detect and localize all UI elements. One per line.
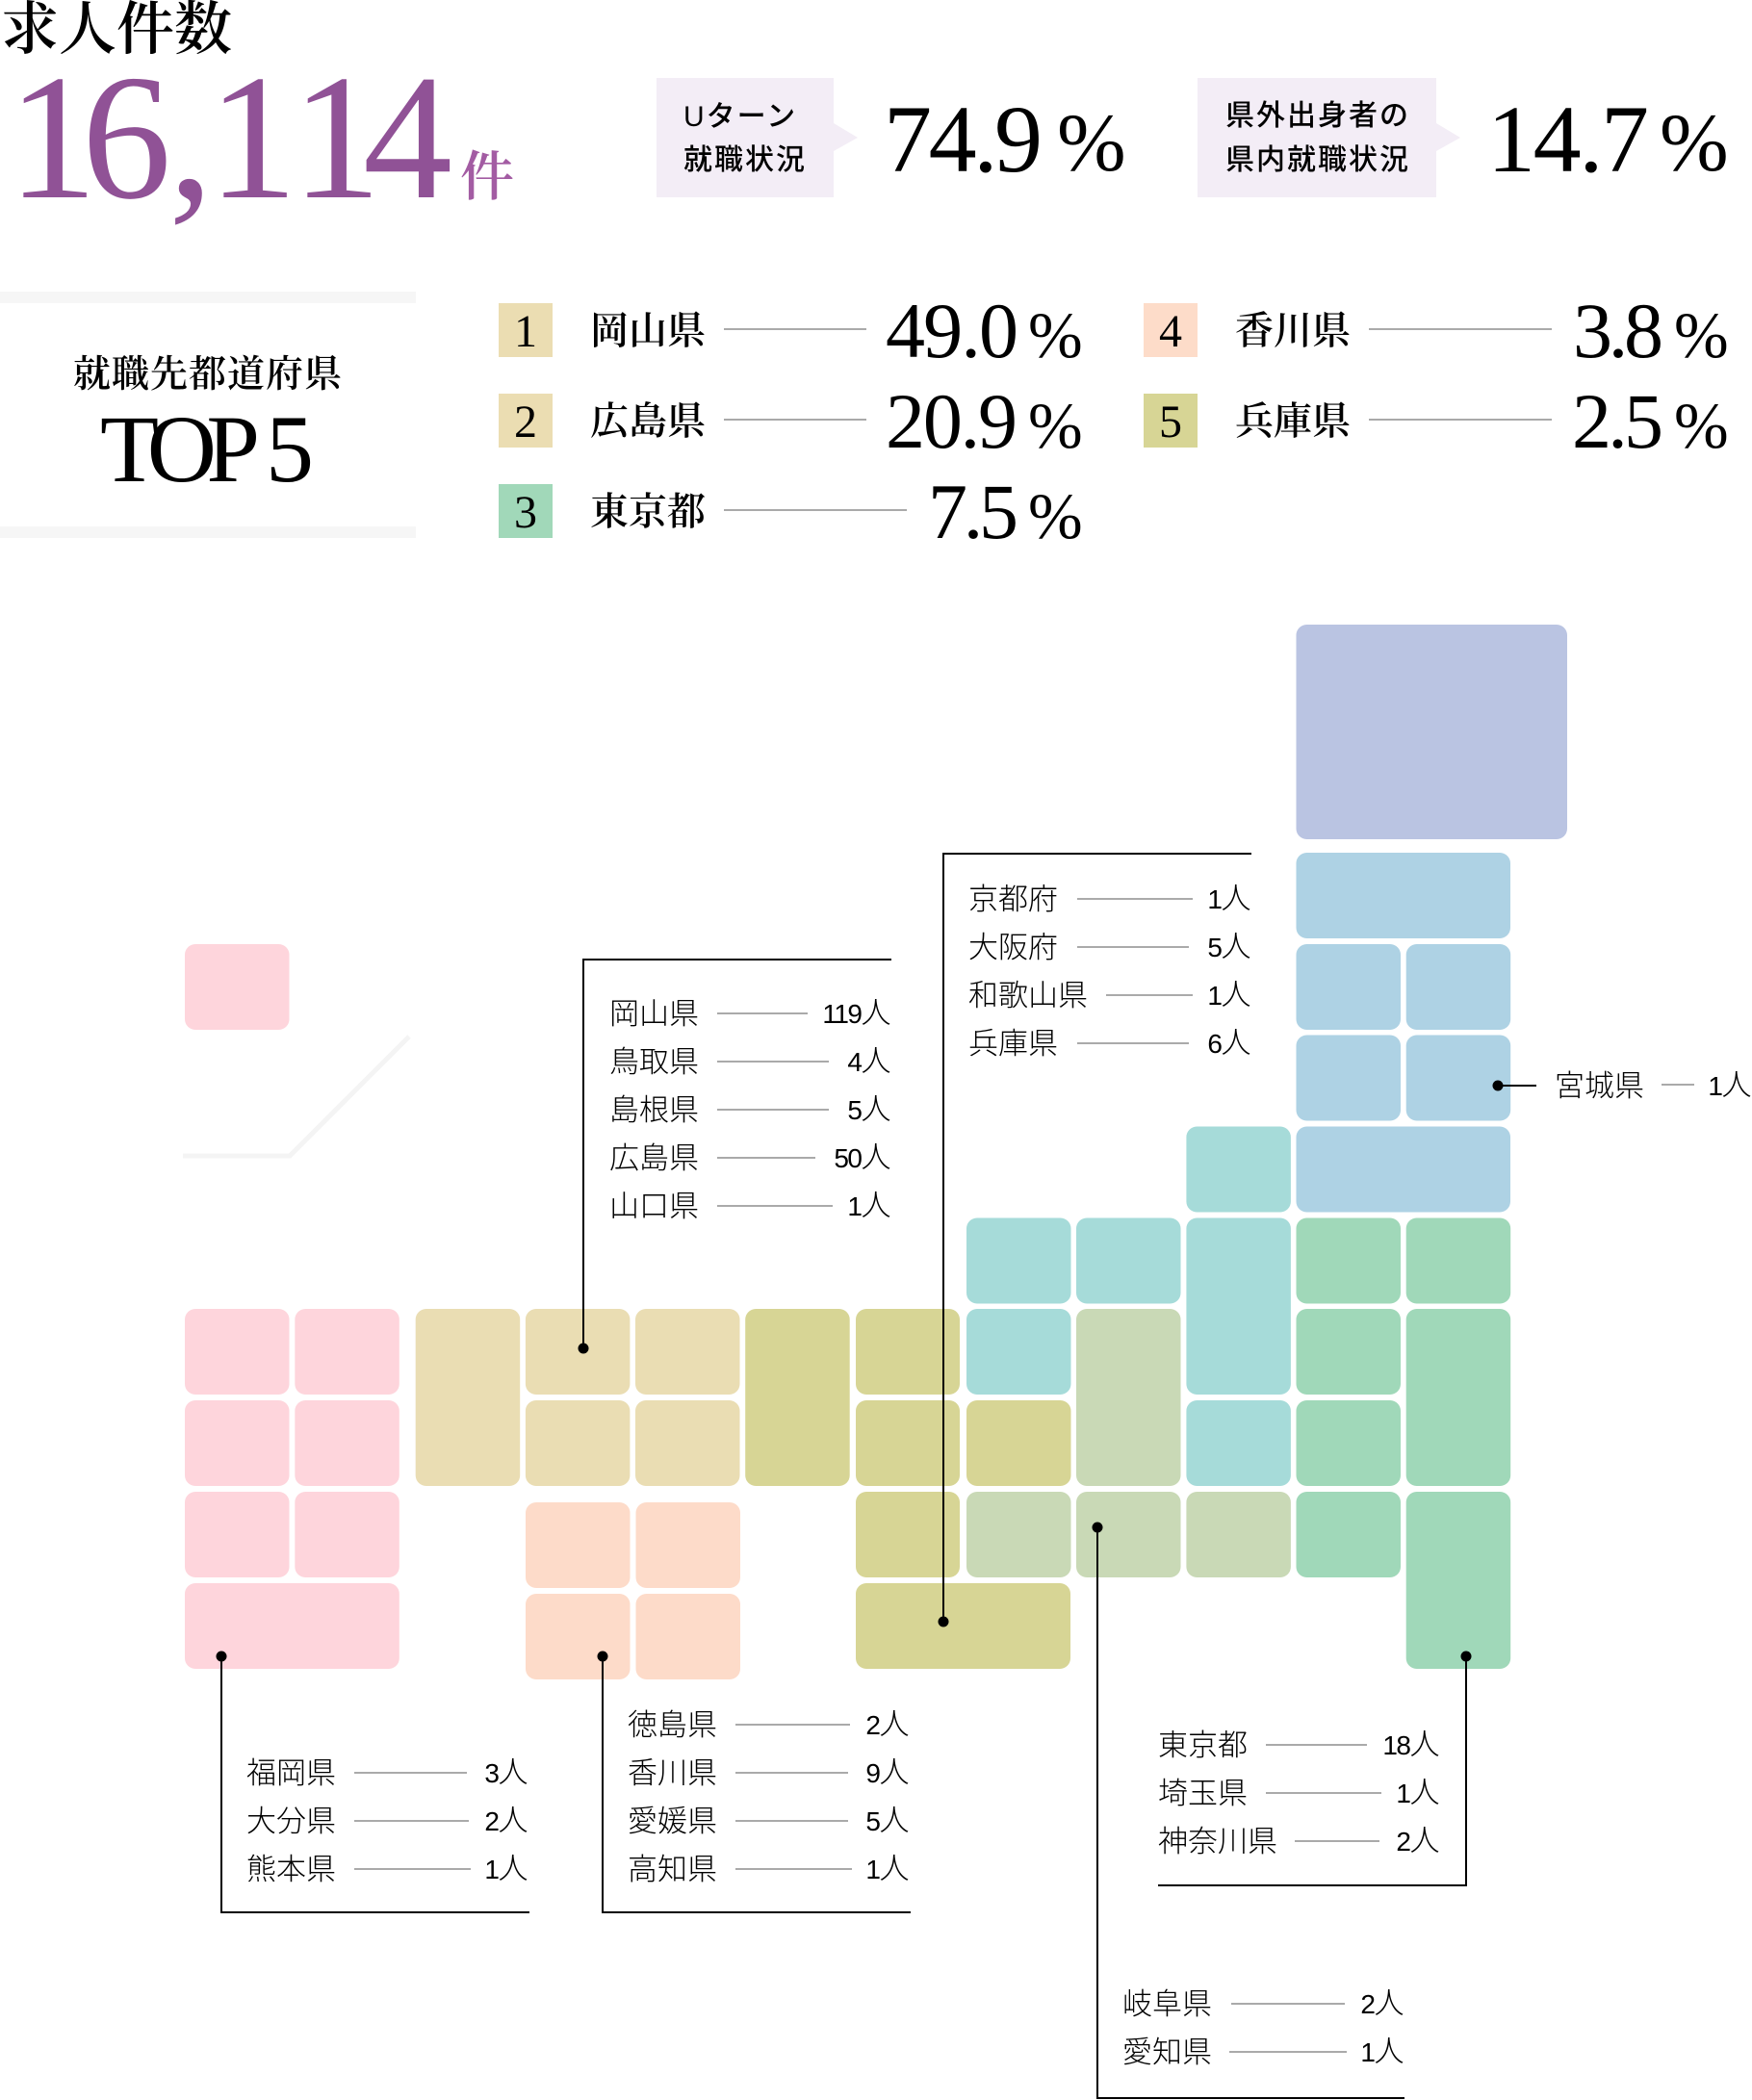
callout: Kanto list bbox=[1158, 1652, 1471, 1885]
callout: Shikoku list: 香川県 bbox=[628, 1756, 717, 1790]
rank 4: Kagawa: % bbox=[1674, 298, 1729, 371]
rank 3: Tokyo bbox=[499, 468, 1083, 555]
rank 1: Okayama: % bbox=[1028, 298, 1083, 371]
callout: local-origin employment bbox=[1198, 78, 1460, 197]
rank 5: Hyogo: % bbox=[1674, 389, 1729, 462]
callout: Kinki list bbox=[938, 854, 1251, 1626]
callout: Shikoku list: 愛媛県 bbox=[628, 1805, 717, 1838]
rank 5: Hyogo: 兵庫県 bbox=[1235, 399, 1351, 443]
region: Tokai bbox=[966, 1309, 1291, 1577]
callout: Shikoku list: 徳島県 bbox=[628, 1708, 717, 1742]
callout: Chugoku list: 5人 bbox=[847, 1092, 889, 1126]
region: Tohoku bbox=[1296, 853, 1510, 1213]
callout: Miyagi bbox=[1492, 1068, 1750, 1103]
region: Hokuriku-Shinetsu bbox=[966, 1126, 1291, 1486]
rank 2: Hiroshima: 20.9 bbox=[886, 377, 1018, 465]
rank 1: Okayama: 1 bbox=[514, 306, 537, 357]
callout: Kinki list: 兵庫県 bbox=[968, 1027, 1058, 1061]
callout: Kyushu list: 大分県 bbox=[246, 1805, 336, 1838]
callout: Kanto list: 埼玉県 bbox=[1158, 1777, 1248, 1810]
callout: Chugoku list bbox=[578, 960, 891, 1353]
region: Kyushu bbox=[185, 1309, 399, 1669]
stat: 74.9%: 74.9 bbox=[884, 86, 1043, 192]
panel: top 5 heading: 就職先都道府県 bbox=[73, 354, 343, 396]
region: Hokkaido bbox=[1296, 625, 1567, 839]
rank 2: Hiroshima: 2 bbox=[514, 397, 537, 448]
callout: Kanto list: 神奈川県 bbox=[1158, 1825, 1277, 1858]
inset divider: Okinawa boundary bbox=[183, 1037, 409, 1156]
callout: Shikoku list: 2人 bbox=[865, 1707, 909, 1741]
panel: top 5 heading: TOP bbox=[100, 396, 260, 502]
stat: 14.7% bbox=[1487, 86, 1729, 192]
rank 1: Okayama bbox=[499, 287, 1083, 374]
callout: local-origin employment: 県内就職状況 bbox=[1225, 144, 1410, 176]
rank 3: Tokyo: 東京都 bbox=[590, 490, 706, 533]
region: Kinki bbox=[745, 1309, 1070, 1669]
rank 2: Hiroshima: % bbox=[1028, 389, 1083, 462]
callout: Tokai list: 1人 bbox=[1360, 2035, 1404, 2068]
callout: Tokai list: 2人 bbox=[1360, 1986, 1404, 2020]
callout: Chugoku list: 1人 bbox=[847, 1189, 889, 1222]
callout: Shikoku list: 9人 bbox=[865, 1755, 909, 1789]
callout: Shikoku list: 1人 bbox=[865, 1852, 909, 1885]
stat: 14.7%: % bbox=[1660, 96, 1729, 189]
callout: Shikoku list: 5人 bbox=[865, 1804, 909, 1837]
callout: Kinki list: 1人 bbox=[1207, 882, 1250, 915]
callout: Tokai list: 岐阜県 bbox=[1122, 1987, 1212, 2021]
big number: 16,114 openings: 件 bbox=[460, 148, 514, 208]
rank 4: Kagawa: 香川県 bbox=[1235, 309, 1351, 352]
rank 4: Kagawa bbox=[1144, 287, 1729, 374]
callout: Chugoku list: 島根県 bbox=[609, 1093, 699, 1127]
map: Japan tile map bbox=[185, 625, 1567, 1679]
callout: Chugoku list: 119人 bbox=[822, 996, 889, 1030]
callout: Kyushu list: 熊本県 bbox=[246, 1853, 336, 1886]
rank 5: Hyogo: 5 bbox=[1159, 397, 1182, 448]
rank 1: Okayama: 岡山県 bbox=[590, 309, 706, 352]
callout: Kanto list: 1人 bbox=[1396, 1776, 1438, 1809]
callout: Chugoku list: 4人 bbox=[847, 1044, 889, 1078]
callout: Miyagi: 宮城県 bbox=[1555, 1069, 1644, 1103]
callout: Chugoku list: 岡山県 bbox=[609, 997, 699, 1031]
rank 5: Hyogo bbox=[1144, 377, 1729, 465]
callout: U-turn employment: 就職状況 bbox=[683, 144, 807, 176]
callout: Kanto list: 2人 bbox=[1396, 1824, 1438, 1857]
callout: Kinki list: 大阪府 bbox=[968, 931, 1058, 964]
rank 2: Hiroshima: 広島県 bbox=[590, 399, 706, 443]
panel: top 5 heading: 5 bbox=[266, 396, 314, 502]
callout: Kyushu list: 3人 bbox=[484, 1755, 528, 1789]
callout: local-origin employment: 県外出身者の bbox=[1225, 100, 1410, 132]
panel: top 5 heading bbox=[0, 292, 416, 538]
callout: Shikoku list bbox=[597, 1652, 911, 1912]
callout: Kanto list: 18人 bbox=[1382, 1728, 1438, 1761]
big number: 16,114 openings: 16,114 bbox=[8, 38, 452, 237]
callout: Kyushu list: 1人 bbox=[484, 1852, 528, 1885]
callout: Shikoku list: 高知県 bbox=[628, 1853, 717, 1886]
rank 4: Kagawa: 3.8 bbox=[1573, 287, 1663, 374]
callout: Chugoku list: 鳥取県 bbox=[609, 1045, 699, 1079]
callout: Kyushu list: 福岡県 bbox=[246, 1756, 336, 1790]
callout: Kyushu list bbox=[216, 1652, 529, 1912]
callout: Kinki list: 6人 bbox=[1207, 1026, 1250, 1060]
callout: Kinki list: 京都府 bbox=[968, 883, 1058, 916]
callout: Chugoku list: 広島県 bbox=[609, 1141, 699, 1175]
rank 4: Kagawa: 4 bbox=[1159, 306, 1182, 357]
region: Kanto bbox=[1296, 1218, 1510, 1669]
callout: Tokai list: 愛知県 bbox=[1122, 2036, 1212, 2069]
callout: U-turn employment: Uターン bbox=[683, 101, 797, 133]
rank 3: Tokyo: % bbox=[1028, 479, 1083, 552]
callout: Kinki list: 5人 bbox=[1207, 930, 1250, 963]
callout: U-turn employment bbox=[657, 78, 858, 197]
region: Chugoku bbox=[416, 1309, 739, 1486]
stat: 14.7%: 14.7 bbox=[1487, 86, 1649, 192]
rank 3: Tokyo: 7.5 bbox=[928, 468, 1018, 555]
stat: 74.9% bbox=[884, 86, 1126, 192]
region: Shikoku bbox=[526, 1502, 740, 1679]
rank 1: Okayama: 49.0 bbox=[886, 287, 1018, 374]
callout: Chugoku list: 50人 bbox=[834, 1140, 889, 1174]
rank 2: Hiroshima bbox=[499, 377, 1083, 465]
stat: 74.9%: % bbox=[1057, 96, 1126, 189]
rank 5: Hyogo: 2.5 bbox=[1572, 377, 1663, 465]
callout: Chugoku list: 山口県 bbox=[609, 1190, 699, 1223]
region: Okinawa bbox=[185, 944, 289, 1030]
callout: Kinki list: 和歌山県 bbox=[968, 979, 1088, 1012]
callout: Tokai list bbox=[1092, 1523, 1404, 2098]
callout: Kinki list: 1人 bbox=[1207, 978, 1250, 1012]
callout: Kanto list: 東京都 bbox=[1158, 1729, 1248, 1762]
callout: Kyushu list: 2人 bbox=[484, 1804, 528, 1837]
rank 3: Tokyo: 3 bbox=[514, 487, 537, 538]
callout: Miyagi: 1人 bbox=[1708, 1068, 1750, 1102]
